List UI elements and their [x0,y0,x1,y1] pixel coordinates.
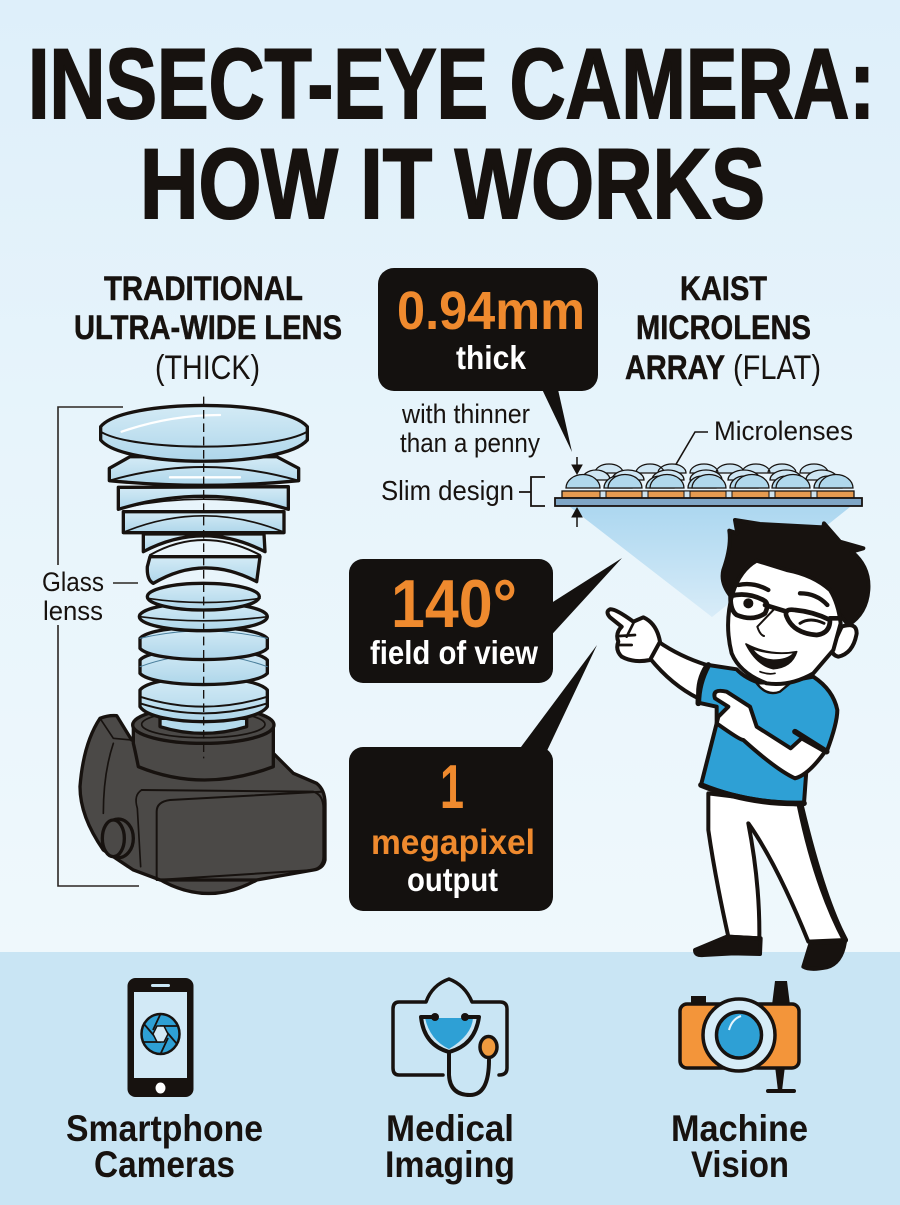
lens mount collar [133,707,274,780]
callout: 1 megapixel output [349,645,597,911]
middle lens group [109,457,299,583]
label: glass lens: Glass [42,567,104,597]
label: smartphone cameras: Smartphone [66,1108,263,1149]
note: thinner than a penny: with thinner [401,399,530,429]
heading: traditional lens: TRADITIONAL [104,270,303,308]
label: microlenses: Microlenses [714,416,853,446]
eye open [743,598,753,608]
pointing hand [607,609,660,661]
callout: 1 megapixel output: megapixel [371,823,535,862]
back row domes [582,464,838,480]
dimension bracket: lens stack height [58,407,139,886]
label: machine vision: Vision [691,1144,789,1185]
thickness arrows [572,457,582,527]
light beam from microlens array [570,507,850,617]
aperture [142,1014,180,1054]
heading: KAIST microlens array [625,270,821,387]
label: glass lens [42,567,138,626]
face [728,561,841,684]
heading: KAIST microlens array: KAIST [680,270,767,308]
trouser leg shadow [800,807,845,940]
callout: 140 degree field of view: field of view [370,634,538,671]
nose [757,610,773,636]
callout: 140 degree field of view [349,558,622,683]
callout: 0.94mm thick: thick [456,339,527,376]
front row domes [566,474,853,488]
eye wink [800,620,824,623]
title [28,28,875,239]
note: thinner than a penny: than a penny [400,428,540,458]
callout: 1 megapixel output: output [407,861,498,898]
callout: 0.94mm thick: 0.94mm [397,281,585,341]
bottom band [0,952,900,1205]
bent arm [714,691,825,778]
icon: smartphone with aperture [128,978,194,1097]
shirt hem and cuffs [698,665,827,803]
illustration: traditional lens stack and camera body [80,397,325,893]
heading: KAIST microlens array: MICROLENS [636,309,811,347]
callout: 0.94mm thick [378,268,598,452]
label: smartphone cameras: Cameras [94,1144,235,1185]
orange sensor strip [562,491,854,498]
neck [757,683,790,693]
label: slim design with bracket: Slim design [381,475,514,506]
shirt [698,665,837,803]
shoes [695,937,761,955]
top lens [101,405,307,477]
note: thinner than a penny [400,399,540,458]
icon: medical stethoscope [393,979,507,1095]
pointing arm [650,642,707,698]
camera body [80,716,325,893]
label: machine vision [671,1108,808,1185]
substrate plate [555,498,862,506]
heading: traditional lens: (THICK) [155,349,260,387]
heading: traditional lens: ULTRA-WIDE LENS [74,309,342,347]
heading: KAIST microlens array: ARRAY [625,349,725,387]
ear [832,625,857,657]
hair [723,520,868,625]
label: smartphone cameras [66,1108,263,1185]
middle row domes [604,476,842,488]
label: machine vision: Machine [671,1108,808,1149]
label: medical imaging: Medical [386,1108,514,1149]
character: man with glasses pointing [607,520,868,969]
callout: 140 degree field of view: 140° [391,566,517,642]
bottom lens group [139,583,267,722]
chin line [760,672,775,674]
microlens array diagram [555,464,862,506]
heading: KAIST microlens array: (FLAT) [733,349,821,387]
callout: 1 megapixel output: 1 [440,753,464,822]
trousers [708,793,846,942]
optical axis [202,397,206,758]
eyebrows [738,584,827,605]
label: microlenses [675,416,853,466]
label: medical imaging [385,1108,515,1185]
sensor gaps [600,491,817,498]
heading: traditional lens [74,270,342,387]
label: glass lens: lenss [43,596,103,626]
glasses [731,595,841,635]
icon: machine vision camera [680,981,799,1093]
teeth [754,650,793,659]
title: HOW IT WORKS [140,128,765,239]
label: medical imaging: Imaging [385,1144,515,1185]
mouth [746,644,797,669]
